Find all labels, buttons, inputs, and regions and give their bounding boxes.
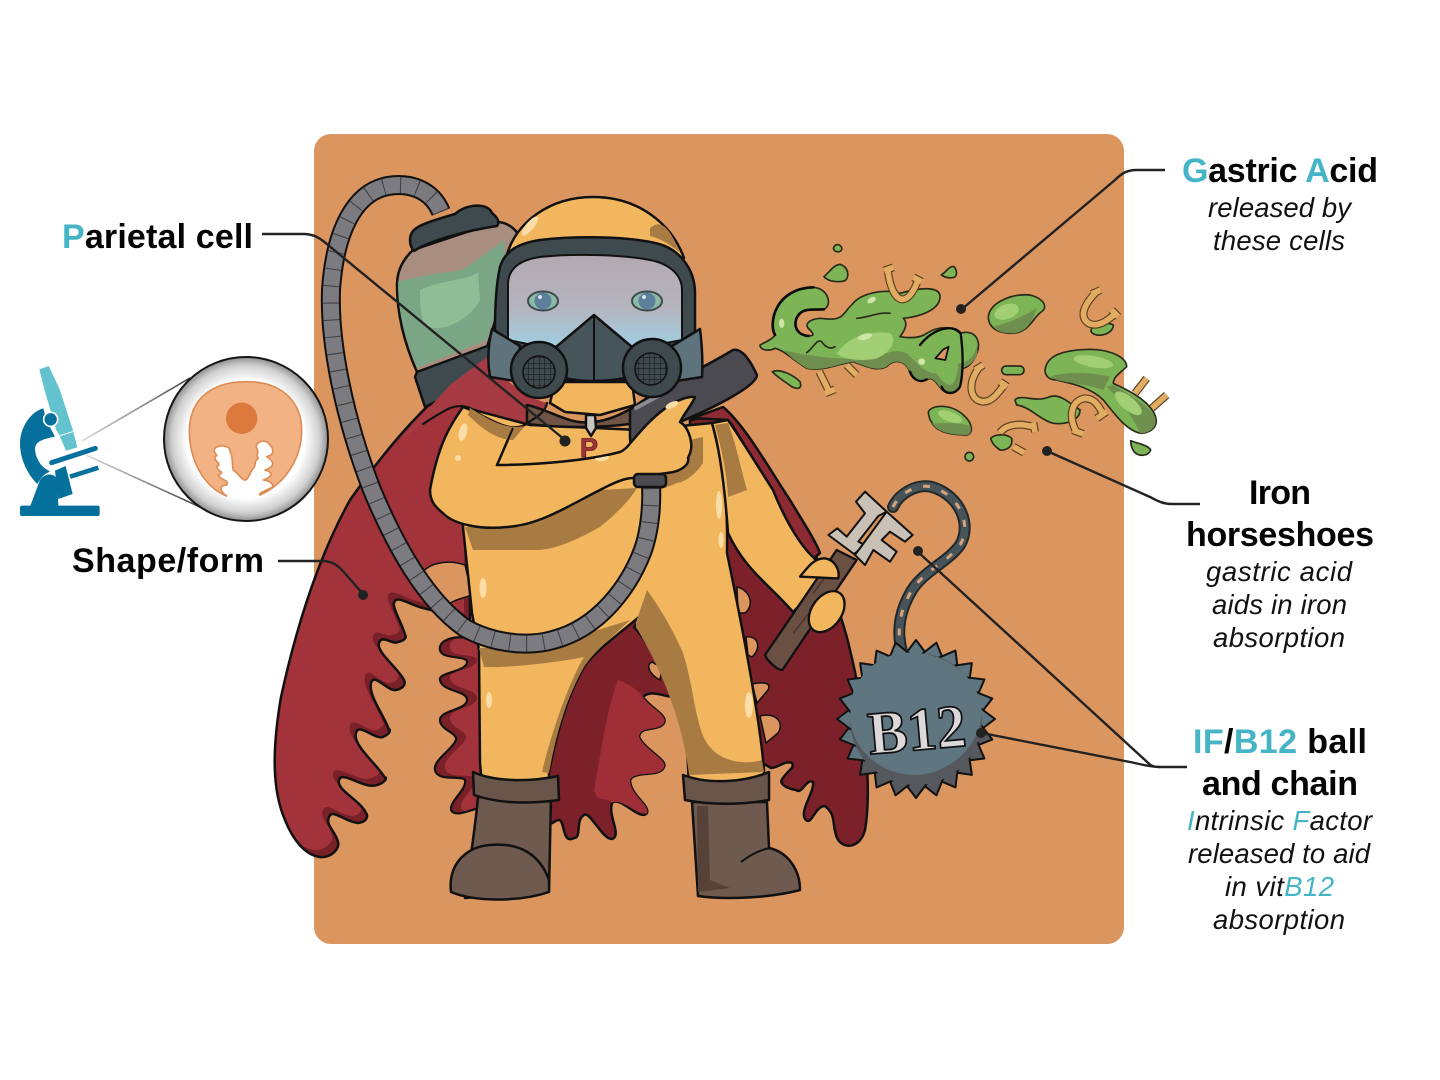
- description: gastric acid: [1206, 556, 1354, 587]
- backpack tank: [397, 206, 520, 407]
- text block: IF/B12 ball and chain: released to aid: [1188, 838, 1372, 869]
- club handle: [765, 550, 857, 670]
- description: Intrinsic Factor: [1187, 805, 1374, 836]
- tank base: [415, 345, 495, 407]
- body suit: thigh shadow under hose: [479, 620, 630, 773]
- body suit: right arm: [712, 420, 830, 612]
- visor: [508, 255, 682, 350]
- cape: dark right side: [690, 415, 868, 846]
- body suit: torso and legs: [463, 407, 764, 785]
- pendant: letter P: P: [580, 433, 598, 463]
- left boot: [451, 772, 559, 900]
- microscope rear support: [55, 466, 73, 499]
- boot shaft and toe: [692, 802, 800, 898]
- text block: IF/B12 ball and chain: [1187, 723, 1374, 935]
- hose ribs: [331, 185, 651, 644]
- right filter: [623, 339, 681, 397]
- heading: Parietal cell: Parietal cell: [62, 218, 253, 256]
- nozzle: [630, 350, 757, 478]
- heading: Shape/form: Shape/form: [72, 542, 264, 580]
- microscope foot: [30, 474, 58, 507]
- tank green liquid: [398, 240, 505, 368]
- collar fold lower edge: [423, 403, 547, 427]
- crease under G: [807, 313, 890, 353]
- acid letter G and A main blob: [760, 287, 979, 393]
- body suit: right arm shadow: [715, 423, 747, 497]
- lens circle: [164, 357, 328, 521]
- cape: left red cape: [273, 405, 472, 858]
- letter I of key: [828, 492, 887, 554]
- arm crease shadow: [468, 408, 525, 440]
- text block: IF/B12 ball and chain: absorption: [1213, 904, 1345, 935]
- mask centre line: [593, 315, 595, 380]
- cell nucleus: [226, 403, 257, 434]
- gaps between cape folds: [421, 562, 780, 743]
- chin and neck: [550, 382, 635, 415]
- heading: Iron: [1249, 474, 1311, 512]
- ball body dark: [850, 653, 982, 785]
- A counter hole: [935, 347, 949, 360]
- boot cuff: [473, 772, 559, 803]
- callout: Parietal cell leader: [262, 234, 570, 446]
- hose fill: [331, 185, 651, 644]
- microscope tube band: [58, 431, 74, 436]
- hose: [331, 185, 651, 644]
- text block: IF/B12 ball and chain: and chain: [1202, 765, 1358, 803]
- collar brown band: [527, 405, 632, 427]
- microscope lower stage: [70, 468, 98, 477]
- wrench IF key and club: [765, 492, 913, 670]
- text block: Iron horseshoes: horseshoes: [1186, 516, 1374, 554]
- right eye: [632, 292, 662, 310]
- microscope knob: [44, 412, 58, 426]
- boot inner shadow: [697, 806, 730, 892]
- helmet dome: [506, 197, 684, 258]
- right boot: [683, 772, 800, 898]
- text block: Iron horseshoes: [1186, 474, 1374, 653]
- acid shiny spots: [779, 295, 925, 365]
- chest flap line: [497, 428, 620, 465]
- cape: inner left scalloped folds: [434, 636, 480, 814]
- letter F of key: [855, 512, 913, 565]
- boot shaft: [465, 797, 551, 898]
- heading: Gastric Acid: [1182, 152, 1378, 190]
- ball label: B12: [865, 693, 969, 768]
- mask right flank: [672, 329, 702, 381]
- droplet shading: [932, 308, 1156, 435]
- ball body light: [850, 653, 982, 775]
- pendant: silver clasp: [586, 415, 596, 436]
- hood: [495, 237, 695, 380]
- hose connector: [634, 474, 666, 487]
- cell drawing: [189, 382, 302, 496]
- text block: Iron horseshoes: aids in iron: [1212, 589, 1347, 620]
- right cape stripe: [693, 407, 820, 560]
- nozzle highlight: [636, 394, 662, 408]
- boot cuff: [683, 772, 769, 804]
- magnified parietal cell: [164, 357, 328, 521]
- A outline: [910, 328, 963, 393]
- character: hazmat figure with cape: [269, 185, 868, 900]
- arm across chest: [430, 397, 695, 528]
- top horseshoe: [884, 267, 922, 299]
- callout: Shape/form leader: [278, 561, 368, 600]
- mask nose cover: [556, 315, 632, 381]
- microscope base: [20, 506, 100, 516]
- tank body: [397, 222, 520, 372]
- text block: Iron horseshoes: absorption: [1213, 622, 1345, 653]
- boot toe crease: [741, 848, 770, 862]
- ball spikes: [837, 640, 995, 798]
- B12 spiked ball: [837, 640, 995, 798]
- icon: microscope: [20, 366, 100, 516]
- heading: IF/B12 ball: [1193, 723, 1367, 761]
- helmet shadow: [650, 224, 680, 252]
- left eye: [528, 292, 558, 310]
- text block: IF/B12 ball and chain: in vitB12: [1225, 871, 1334, 902]
- club grain: [793, 570, 830, 633]
- tank cap: [410, 206, 498, 251]
- text block: Gastric Acid: these cells: [1213, 225, 1345, 256]
- cell body: [189, 382, 302, 496]
- suit highlights: [480, 491, 753, 718]
- tank liquid highlight: [420, 272, 480, 328]
- suit highlights upper: [455, 399, 680, 462]
- helmet highlight: [519, 214, 541, 238]
- cape: between legs: [540, 600, 690, 839]
- droplet highlights: [936, 300, 1145, 426]
- text block: Gastric Acid: [1182, 152, 1378, 256]
- description: released by: [1208, 192, 1353, 223]
- callout: Gastric acid leader: [956, 170, 1165, 314]
- boot toe: [451, 845, 549, 900]
- G outline: [773, 287, 824, 336]
- microscope stage: [52, 448, 95, 463]
- microscope tube: [39, 366, 77, 451]
- body suit: right leg shadow: [636, 590, 764, 775]
- cape collar fold on left shoulder: [400, 357, 547, 440]
- finger lower: [801, 584, 852, 639]
- hose outline: [331, 185, 651, 644]
- helmet: [488, 197, 702, 398]
- front horseshoes: [971, 290, 1118, 453]
- panel: orange background: [314, 134, 1124, 944]
- acid droplets: [772, 245, 1156, 461]
- green acid splash spelling GA with horseshoes: [760, 245, 1167, 461]
- horseshoes behind acid: [819, 365, 1167, 408]
- acid bottom shade: [783, 345, 978, 393]
- body suit: shadow right of arm: [660, 437, 703, 490]
- magnifier beams: [82, 378, 200, 507]
- microscope arm: [20, 408, 55, 484]
- callout: IF and B12 leaders: [913, 546, 1187, 767]
- acid light patch: [837, 333, 893, 360]
- chain: [893, 486, 965, 652]
- mask left flank: [488, 329, 520, 381]
- left filter: [511, 342, 567, 398]
- callout: Iron horseshoes leader: [1042, 446, 1200, 504]
- finger upper: [800, 558, 839, 578]
- cape: between legs red fold: [594, 680, 665, 814]
- body suit: torso shadow under arm: [465, 488, 637, 550]
